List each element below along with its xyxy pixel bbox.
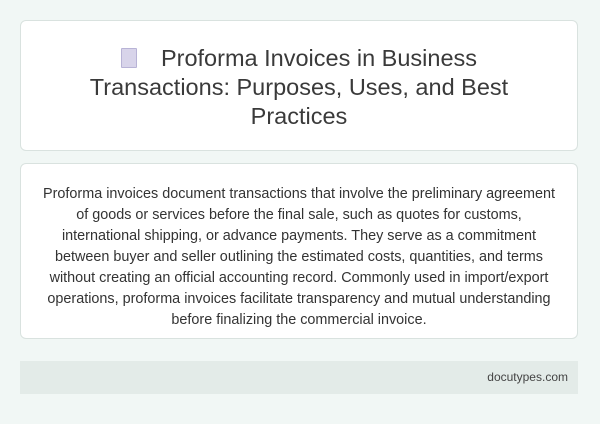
text block xyxy=(43,186,555,328)
panel: title card xyxy=(20,20,578,151)
footer bar xyxy=(20,361,578,394)
text block: Proforma invoices document transactions that involve the preliminary agreement xyxy=(43,186,555,202)
title xyxy=(90,45,508,129)
title: Practices xyxy=(251,103,347,129)
text block: international shipping, or advance payments. They serve as a commitment xyxy=(62,228,536,244)
text block: between buyer and seller outlining the estimated costs, quantities, and terms xyxy=(55,249,543,265)
text block: operations, proforma invoices facilitate transparency and mutual understanding xyxy=(47,291,551,307)
title: Proforma Invoices in Business xyxy=(161,45,477,71)
title: Transactions: Purposes, Uses, and Best xyxy=(90,74,508,100)
text block: of goods or services before the final sale, such as quotes for customs, xyxy=(76,207,522,223)
panel: description xyxy=(20,163,578,339)
text block: before finalizing the commercial invoice. xyxy=(171,312,427,328)
footer text: docutypes.com xyxy=(487,370,568,384)
text block: without creating an official accounting record. Commonly used in import/export xyxy=(50,270,548,286)
